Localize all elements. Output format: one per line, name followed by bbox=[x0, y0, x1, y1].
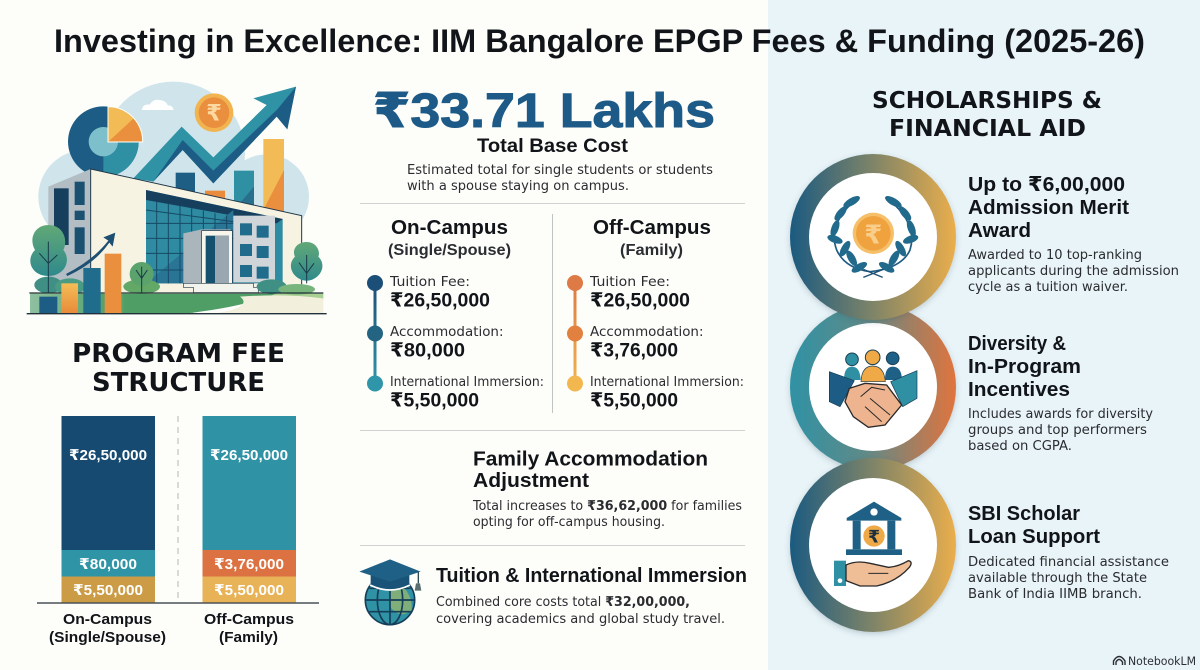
panel: off-campus breakdown bbox=[567, 217, 744, 412]
text block: family accommodation adjustment: opting for off-campus housing. bbox=[473, 514, 665, 530]
panel: off-campus breakdown: Tuition Fee: bbox=[589, 274, 670, 290]
headline figure: total base cost: ₹33.71 Lakhs bbox=[373, 85, 715, 138]
text block: merit award bbox=[968, 173, 1179, 295]
text block: family accommodation adjustment: Adjustment bbox=[473, 469, 589, 492]
headline figure: total base cost: Total Base Cost bbox=[477, 136, 629, 157]
text block: merit award: Award bbox=[968, 219, 1031, 242]
text block: diversity incentives: groups and top performers bbox=[968, 423, 1147, 438]
heading: scholarships and financial aid bbox=[872, 88, 1102, 142]
background: right panel bbox=[768, 0, 1200, 670]
text block: tuition and international immersion: Tuition & International Immersion bbox=[436, 565, 747, 587]
panel: off-campus breakdown: ₹3,76,000 bbox=[590, 340, 678, 362]
ring: diversity incentives bbox=[790, 304, 956, 470]
text block: tuition and international immersion: Combined core costs total ₹32,00,000, bbox=[436, 594, 690, 610]
title: Investing in Excellence: IIM Bangalore EPGP Fees & Funding (2025-26) bbox=[54, 23, 1145, 59]
bar: on-campus: ₹5,50,000 bbox=[73, 582, 143, 599]
headline figure: total base cost: with a spouse staying on campus. bbox=[407, 178, 629, 194]
panel: on-campus breakdown: ₹80,000 bbox=[390, 340, 465, 362]
text block: diversity incentives: Diversity & bbox=[968, 332, 1066, 355]
text block: diversity incentives: Includes awards for diversity bbox=[968, 407, 1153, 422]
text block: diversity incentives: In-Program bbox=[968, 355, 1081, 378]
heading: scholarships and financial aid: FINANCIAL AID bbox=[889, 116, 1086, 142]
icon: laurel wreath with rupee coin bbox=[826, 194, 919, 277]
text block: diversity incentives: based on CGPA. bbox=[968, 439, 1072, 454]
stacked bar chart: program fees bbox=[37, 416, 319, 646]
text block: merit award: Admission Merit bbox=[968, 196, 1129, 219]
heading: program fee structure bbox=[72, 339, 285, 398]
text block: family accommodation adjustment: Family Accommodation bbox=[473, 448, 708, 470]
background: left panel bbox=[0, 0, 768, 670]
text block: merit award: Awarded to 10 top-ranking bbox=[968, 248, 1142, 263]
headline figure: total base cost bbox=[373, 85, 715, 194]
panel: on-campus breakdown: ₹26,50,000 bbox=[390, 290, 490, 312]
panel: off-campus breakdown: ₹26,50,000 bbox=[590, 290, 690, 312]
text block: diversity incentives: Incentives bbox=[968, 378, 1070, 401]
panel: off-campus breakdown: Off-Campus bbox=[593, 217, 711, 239]
panel: off-campus breakdown: Accommodation: bbox=[590, 324, 704, 340]
illustration: campus building with growth charts bbox=[27, 82, 327, 314]
text block: tuition and international immersion bbox=[436, 565, 747, 627]
text block: SBI loan support bbox=[968, 502, 1169, 602]
illustration: campus building with growth charts: ₹ bbox=[206, 101, 222, 127]
panel: on-campus breakdown: ₹5,50,000 bbox=[390, 390, 479, 412]
text block: diversity incentives bbox=[968, 332, 1153, 454]
bar: off-campus: ₹5,50,000 bbox=[214, 582, 284, 599]
headline figure: total base cost: Estimated total for single students or students bbox=[407, 162, 713, 178]
panel: off-campus breakdown: (Family) bbox=[620, 242, 683, 259]
axis label: on-campus: (Single/Spouse) bbox=[49, 629, 166, 646]
heading: program fee structure: PROGRAM FEE bbox=[72, 339, 285, 369]
icon: laurel wreath with rupee coin: ₹ bbox=[864, 220, 882, 250]
axis label: on-campus: On-Campus bbox=[63, 611, 152, 628]
bar: off-campus: ₹3,76,000 bbox=[214, 556, 284, 573]
bar: off-campus: ₹26,50,000 bbox=[210, 447, 288, 464]
text block: SBI loan support: Bank of India IIMB branch. bbox=[968, 587, 1142, 602]
heading: scholarships and financial aid: SCHOLARSHIPS & bbox=[872, 88, 1102, 114]
panel: on-campus breakdown bbox=[367, 217, 544, 412]
panel: off-campus breakdown: International Immersion: bbox=[590, 374, 744, 390]
heading: program fee structure: STRUCTURE bbox=[92, 368, 265, 398]
axis label: off-campus: Off-Campus bbox=[204, 611, 294, 628]
bar: on-campus: ₹80,000 bbox=[79, 556, 137, 573]
text block: SBI loan support: Loan Support bbox=[968, 525, 1100, 548]
text block: family accommodation adjustment: Total increases to ₹36,62,000 for families bbox=[472, 498, 742, 514]
icon: bank over open hand bbox=[834, 502, 911, 586]
text block: SBI loan support: available through the State bbox=[968, 571, 1147, 586]
panel: on-campus breakdown: (Single/Spouse) bbox=[388, 242, 511, 259]
panel: on-campus breakdown: Tuition Fee: bbox=[389, 274, 470, 290]
axis label: on-campus bbox=[49, 611, 166, 646]
text block: merit award: Up to ₹6,00,000 bbox=[968, 173, 1125, 196]
axis label: off-campus bbox=[204, 611, 294, 646]
panel: on-campus breakdown: Accommodation: bbox=[390, 324, 504, 340]
text block: merit award: applicants during the admission bbox=[968, 264, 1179, 279]
text block: tuition and international immersion: covering academics and global study travel. bbox=[436, 611, 725, 627]
panel: off-campus breakdown: ₹5,50,000 bbox=[590, 390, 678, 412]
panel: on-campus breakdown: International Immersion: bbox=[390, 374, 544, 390]
icon: graduation cap on globe bbox=[359, 559, 421, 625]
bar: on-campus bbox=[62, 416, 155, 603]
axis label: off-campus: (Family) bbox=[219, 629, 278, 646]
icon: people and handshake bbox=[829, 350, 917, 427]
bar: on-campus: ₹26,50,000 bbox=[69, 447, 147, 464]
icon: bank over open hand: ₹ bbox=[868, 528, 880, 548]
ring: admission merit award bbox=[790, 154, 956, 320]
bar: off-campus bbox=[202, 416, 296, 603]
text block: merit award: cycle as a tuition waiver. bbox=[968, 280, 1128, 295]
text block: SBI loan support: Dedicated financial assistance bbox=[968, 555, 1169, 570]
panel: on-campus breakdown: On-Campus bbox=[391, 217, 508, 239]
ring: SBI loan bbox=[790, 458, 956, 632]
text block: family accommodation adjustment bbox=[472, 448, 742, 530]
text block: SBI loan support: SBI Scholar bbox=[968, 502, 1080, 525]
logo: NotebookLM: NotebookLM bbox=[1128, 654, 1196, 668]
